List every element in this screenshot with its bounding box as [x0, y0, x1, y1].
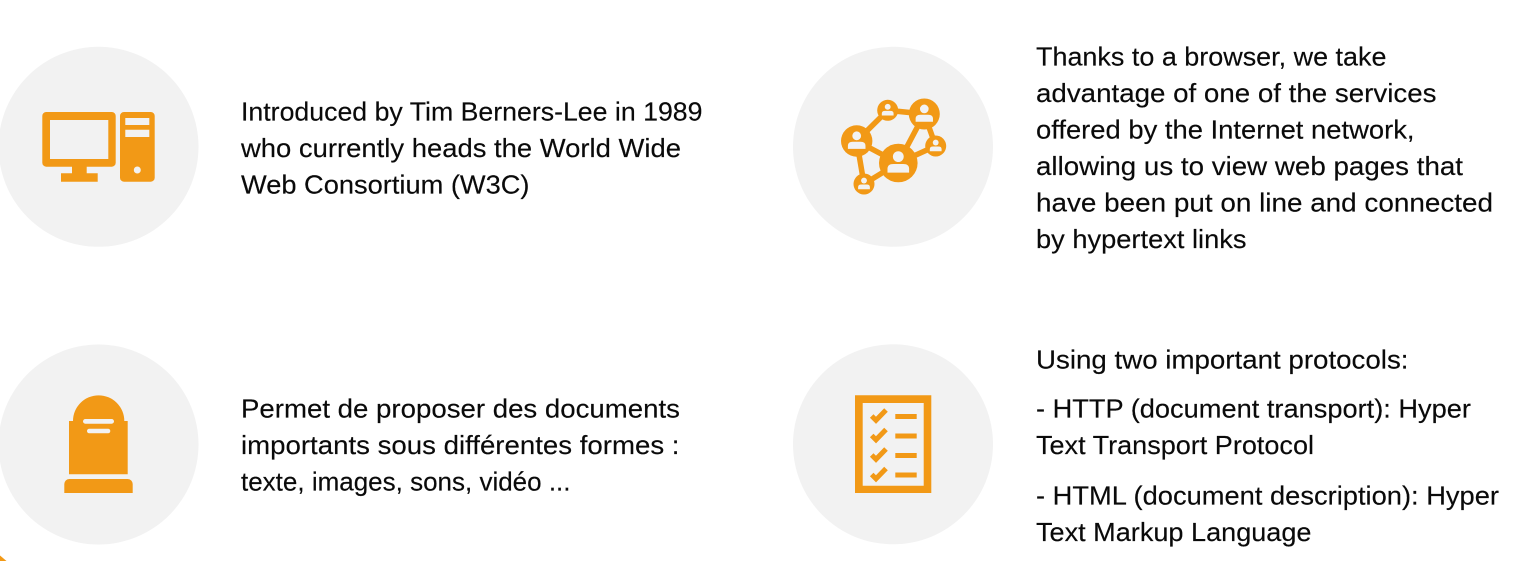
text: browser description: advantage of one of the services	[1036, 78, 1436, 108]
text: documents description: importants sous différentes formes :	[241, 430, 680, 460]
text: browser description: offered by the Internet network,	[1036, 115, 1414, 145]
text: protocols description: - HTML (document description): Hyper	[1036, 481, 1499, 511]
text: browser description: by hypertext links	[1036, 224, 1246, 254]
text: inventor description	[240, 96, 702, 200]
text: browser description: have been put on line and connected	[1036, 188, 1493, 218]
text: browser description: Thanks to a browser, we take	[1036, 42, 1386, 72]
text: protocols description: Text Markup Language	[1036, 517, 1312, 547]
icon: people network	[793, 47, 993, 247]
text: protocols description: Using two important protocols:	[1036, 345, 1408, 375]
text: inventor description: who currently heads the World Wide	[240, 133, 681, 163]
text: inventor description: Introduced by Tim Berners-Lee in 1989	[241, 96, 702, 126]
panel: protocols	[793, 344, 1499, 547]
corner accent	[0, 556, 6, 561]
text: browser description: allowing us to view web pages that	[1036, 151, 1464, 181]
panel: browser	[793, 42, 1493, 254]
text: documents description: Permet de proposer des documents	[241, 394, 680, 424]
icon: checklist	[793, 344, 993, 544]
text: documents description: texte, images, sons, vidéo ...	[241, 467, 570, 497]
icon: desktop computer	[0, 47, 198, 247]
text: inventor description: Web Consortium (W3C)	[241, 170, 530, 200]
text: browser description	[1036, 42, 1493, 254]
text: protocols description: Text Transport Protocol	[1036, 430, 1314, 460]
panel: documents	[0, 344, 680, 544]
text: protocols description: - HTTP (document transport): Hyper	[1036, 394, 1471, 424]
icon: milestone	[0, 344, 198, 544]
text: protocols description	[1036, 345, 1499, 547]
panel: inventor	[0, 47, 702, 247]
text: documents description	[241, 394, 680, 497]
